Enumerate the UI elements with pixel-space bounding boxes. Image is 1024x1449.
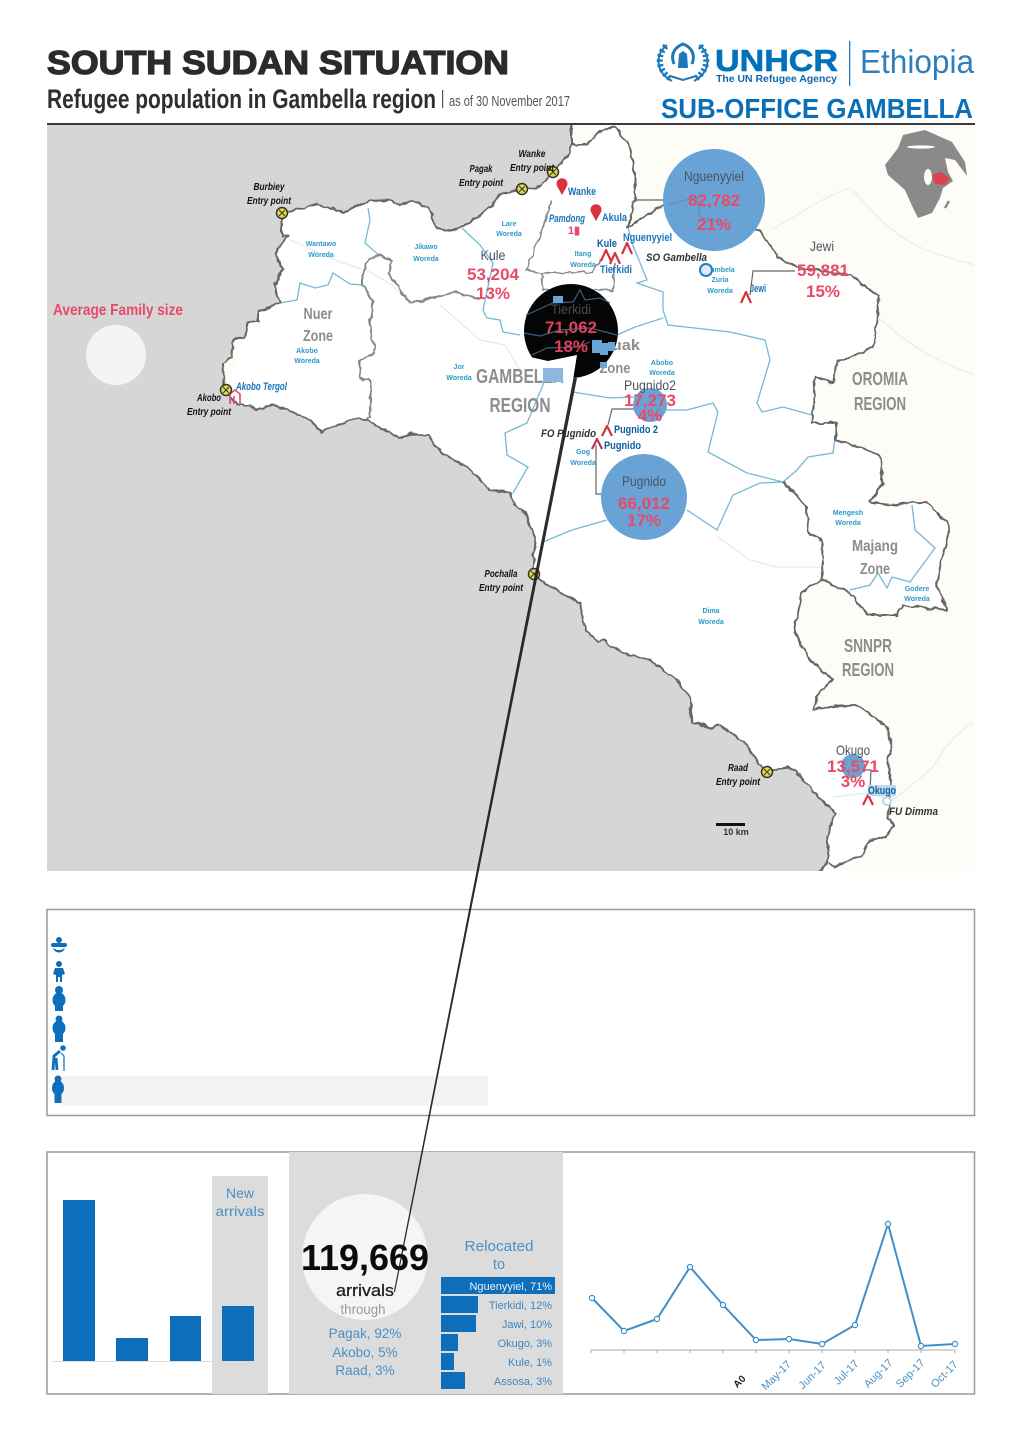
camp label: Kule: [467, 247, 520, 303]
country name: Ethiopia: [860, 43, 975, 80]
woreda labels: Woreda: [649, 370, 675, 377]
total arrivals callout: arrivals: [336, 1281, 394, 1300]
agency tagline: The UN Refugee Agency: [716, 74, 837, 85]
icon: elderly: [53, 1045, 66, 1071]
line chart: monthly arrivals: [589, 1221, 961, 1393]
camp names: Akula: [602, 212, 628, 224]
woreda labels: Godere: [905, 586, 929, 593]
office labels: FO Pugnido: [541, 428, 596, 440]
line chart: monthly arrivals: Sep-17: [894, 1357, 927, 1390]
camp names: Tierkidi: [600, 264, 632, 276]
woreda labels: Woreda: [570, 262, 596, 269]
blue administrative rivers: [280, 208, 935, 590]
inset globe: [885, 130, 967, 218]
arrow: connector from Tierkidi to arrivals callout: [394, 378, 577, 1292]
camp circle: Okugo: Okugo: [836, 742, 870, 758]
Gambella region label: GAMBELLA: [476, 366, 564, 388]
line chart: monthly arrivals: Aug-17: [862, 1357, 895, 1390]
woreda labels: Woreda: [496, 231, 522, 238]
woreda labels: Woreda: [570, 460, 596, 467]
camp names: Pugnido: [604, 440, 641, 452]
zone labels: Zone: [600, 360, 630, 377]
line chart: monthly arrivals: Jun-17: [797, 1360, 829, 1392]
office labels: [541, 252, 938, 818]
woreda labels: Gog: [576, 449, 590, 456]
camp circle: Okugo: 13,571: [827, 757, 879, 776]
icon: infant: [51, 937, 67, 952]
woreda labels: Mengesh: [833, 510, 863, 517]
entry point labels: Entry point: [247, 196, 292, 207]
office labels: SO Gambella: [646, 252, 707, 264]
camp circle: Pugnido 2: [624, 377, 676, 425]
relocation bars: Okugo, 3%: [498, 1338, 552, 1350]
entry point labels: Entry point: [187, 407, 232, 418]
woreda labels: Woreda: [294, 358, 320, 365]
average family size: [53, 302, 183, 385]
bar chart: arrivals by period: [52, 1200, 254, 1362]
camp names: Nguenyyiel: [623, 232, 672, 244]
woreda labels: Gambela: [705, 267, 735, 274]
relocation bars: Relocated: [464, 1239, 534, 1255]
line chart: monthly arrivals: Oct-17: [929, 1359, 961, 1391]
camp circle: Pugnido: Pugnido: [622, 473, 666, 489]
camp circle: Pugnido 2: 4%: [638, 406, 662, 425]
icon: adolescent: [52, 986, 66, 1011]
woreda labels: Lare: [502, 221, 516, 228]
camp circle: Nguenyyiel: Nguenyyiel: [684, 168, 744, 184]
camp circle: Okugo: [827, 742, 879, 791]
zone labels: OROMIA: [852, 369, 908, 389]
entry point labels: Wanke: [518, 149, 546, 160]
camp names: Jewi: [750, 283, 766, 295]
woreda labels: Zuria: [711, 277, 729, 284]
panel: demographics: [47, 910, 974, 1116]
zone labels: Anuak: [590, 337, 641, 354]
camp label: Jewi: Jewi: [810, 238, 834, 254]
zone labels: Zone: [860, 561, 890, 578]
camp label: Kule: 53,204: [467, 265, 520, 284]
woreda labels: Woreda: [308, 252, 334, 259]
woreda labels: Dima: [702, 608, 720, 615]
entry point markers: [220, 166, 772, 778]
camp circle: Tierkidi: Tierkidi: [551, 301, 591, 317]
total arrivals callout: through: [340, 1301, 386, 1317]
icon: child: [53, 961, 65, 982]
office labels: FU Dimma: [889, 806, 938, 818]
camp markers: [592, 243, 873, 805]
UNHCR logotype: UNHCR: [715, 43, 838, 78]
woreda labels: Jikawo: [414, 244, 438, 251]
title: SOUTH SUDAN SITUATION: [47, 44, 509, 81]
total arrivals callout: [301, 1194, 429, 1378]
woreda labels: Woreda: [698, 619, 724, 626]
total arrivals callout: Pagak, 92%: [329, 1326, 401, 1341]
camp circle: Tierkidi: 71,062: [545, 318, 597, 337]
woreda labels: Woreda: [413, 256, 439, 263]
entry point labels: Akobo: [196, 393, 221, 404]
woreda labels: Woreda: [835, 520, 861, 527]
sub-office title: SUB-OFFICE GAMBELLA: [661, 93, 973, 124]
blue label patches: [543, 296, 615, 382]
entry point labels: Raad: [728, 763, 749, 774]
woreda labels: [294, 221, 930, 626]
Gambella region white fill: [224, 127, 950, 878]
woreda labels: Woreda: [707, 288, 733, 295]
camp circle: Nguenyyiel: 82,782: [688, 191, 740, 210]
scale bar: 10 km: [723, 827, 749, 837]
relocation bars: Kule, 1%: [508, 1357, 552, 1369]
camp circle: Pugnido: 17%: [627, 511, 661, 530]
entry point labels: [187, 149, 761, 788]
map base layers: [38, 116, 975, 880]
icon: location pins: 1▮: [568, 225, 580, 237]
line chart: monthly arrivals: A0: [732, 1373, 749, 1390]
camp label: Kule: Kule: [480, 247, 506, 263]
woreda labels: Abobo: [651, 360, 673, 367]
zone labels: [303, 306, 908, 680]
camp label: Jewi: [797, 238, 849, 301]
panel: arrivals: [47, 1152, 974, 1394]
Gambella region label: REGION: [490, 395, 550, 417]
international and zone borders: [223, 116, 950, 878]
line chart: monthly arrivals: May-17: [759, 1358, 794, 1393]
new arrivals heading: [216, 1185, 264, 1219]
entry point labels: Burbiey: [254, 182, 285, 193]
relocation bars: Tierkidi, 12%: [489, 1300, 552, 1312]
woreda labels: Wantawo: [306, 241, 336, 248]
relocation bars: to: [493, 1257, 505, 1273]
camp circle: Nguenyyiel: [663, 149, 765, 251]
camp circle: Tierkidi: [524, 284, 618, 380]
camp circle: Pugnido: [601, 454, 687, 540]
camp circle: Nguenyyiel: 21%: [697, 215, 731, 234]
camp names: Pugnido 2: [614, 424, 658, 436]
camp label: Jewi: 15%: [806, 282, 840, 301]
camp names: Kule: [597, 238, 617, 250]
line chart: monthly arrivals: Jul-17: [832, 1358, 862, 1388]
camp label: Jewi: 59,881: [797, 261, 849, 280]
South Sudan territory: [38, 116, 835, 880]
Gambella region label: [476, 366, 564, 417]
camp circle: Pugnido: 66,012: [618, 494, 670, 513]
camp names: Wanke: [568, 186, 596, 198]
woreda labels: Jor: [454, 364, 465, 371]
entry point labels: Entry point: [716, 777, 761, 788]
subtitle: Refugee population in Gambella region: [47, 84, 436, 114]
woreda labels: Woreda: [904, 596, 930, 603]
new arrivals heading: New: [226, 1185, 255, 1201]
date: [442, 90, 570, 110]
date: as of 30 November 2017: [449, 93, 570, 110]
faint rivers on white: [290, 240, 893, 800]
woreda labels: Itang: [575, 251, 591, 258]
camp names: Pamdong: [549, 213, 585, 225]
relocation bars: Assosa, 3%: [494, 1376, 552, 1388]
woreda labels: Woreda: [446, 375, 472, 382]
map panel: [38, 116, 975, 880]
woreda labels: Akobo: [296, 348, 318, 355]
total arrivals callout: 119,669: [301, 1237, 429, 1278]
zone labels: Zone: [303, 328, 333, 345]
zone labels: REGION: [842, 660, 894, 680]
camp label: Kule: 13%: [476, 284, 510, 303]
zone labels: Majang: [852, 538, 898, 555]
icon: Akobo shelter: [230, 390, 240, 404]
entry point labels: Entry point: [459, 178, 504, 189]
camp circle: Pugnido 2: 17,273: [624, 391, 676, 410]
camp names: [235, 186, 896, 797]
entry point labels: Entry point: [510, 163, 555, 174]
total arrivals callout: Raad, 3%: [335, 1363, 395, 1378]
icon: UNHCR emblem: [659, 44, 707, 81]
entry point labels: Entry point: [479, 583, 524, 594]
callout leader lines: [596, 200, 871, 790]
zone labels: SNNPR: [844, 636, 892, 656]
entry point labels: Pagak: [470, 164, 493, 175]
camp circle: Tierkidi: 18%: [554, 337, 588, 356]
camp circle: Pugnido 2: Pugnido2: [624, 377, 676, 393]
faint rivers on cream: [770, 188, 975, 800]
relocation bars: Nguenyyiel, 71%: [469, 1281, 552, 1293]
new arrivals heading: arrivals: [216, 1203, 264, 1219]
entry point labels: Pochalla: [484, 569, 518, 580]
relocation bars: Jawi, 10%: [502, 1319, 552, 1331]
camp names: Akobo Tergol: [235, 381, 288, 393]
icon: adult: [52, 1016, 66, 1042]
header: [47, 41, 975, 125]
zone labels: Nuer: [304, 306, 332, 323]
total arrivals callout: Akobo, 5%: [332, 1345, 398, 1360]
camp names: Okugo: [868, 785, 896, 797]
icon: total population: [52, 1076, 64, 1103]
zone labels: REGION: [854, 394, 906, 414]
average family size: Average Family size: [53, 302, 183, 319]
scale bar: [716, 823, 749, 837]
icon: location pins: [557, 178, 602, 237]
relocation bars: [441, 1239, 555, 1389]
camp circle: Okugo: 3%: [841, 772, 865, 791]
